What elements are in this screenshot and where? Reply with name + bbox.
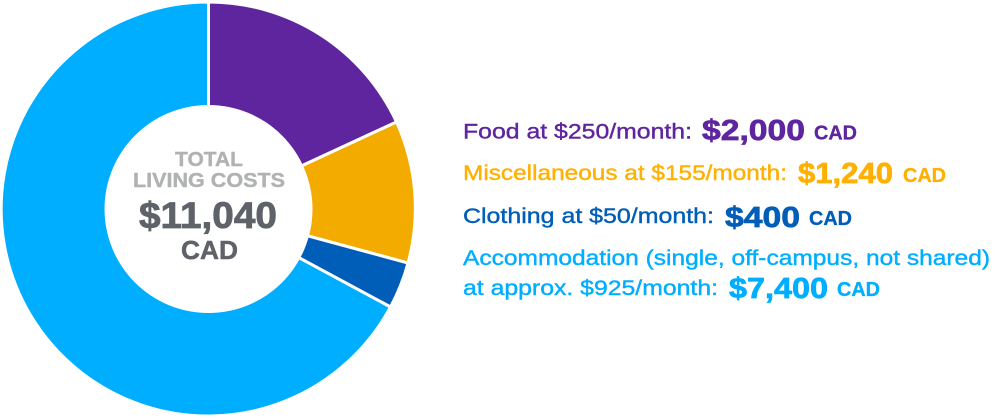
legend: food: $2,000 [702,115,805,147]
legend: accommodation [463,246,990,305]
legend: accommodation: at approx. $925/month: [463,276,718,300]
legend: food [463,115,857,147]
heading: total living costs: LIVING COSTS [133,170,285,192]
heading: total living costs: TOTAL [175,149,243,171]
legend: miscellaneous: $1,240 [798,158,893,190]
legend: miscellaneous: CAD [903,165,946,187]
legend: accommodation: Accommodation (single, off-campus, not shared) [463,246,990,270]
slice: accommodation [1,2,391,416]
legend: clothing [463,202,852,234]
legend: food: Food at $250/month: [463,120,692,144]
legend: miscellaneous: Miscellaneous at $155/month: [463,161,787,185]
donut chart [1,2,415,416]
slice: miscellaneous [208,122,415,263]
centre total label [133,149,285,265]
donut hole [104,105,312,313]
legend: miscellaneous [463,158,946,190]
legend: accommodation: $7,400 [729,273,828,305]
legend: clothing: CAD [809,208,852,230]
heading: total living costs [133,149,285,192]
legend: food: CAD [814,122,857,144]
slice: food [208,2,396,209]
legend: clothing: $400 [725,202,800,234]
total amount: $11,040 [139,195,277,236]
legend: clothing: Clothing at $50/month: [463,204,714,228]
legend: accommodation: CAD [837,279,880,301]
slice: clothing [208,209,408,307]
total currency: CAD [181,235,238,265]
